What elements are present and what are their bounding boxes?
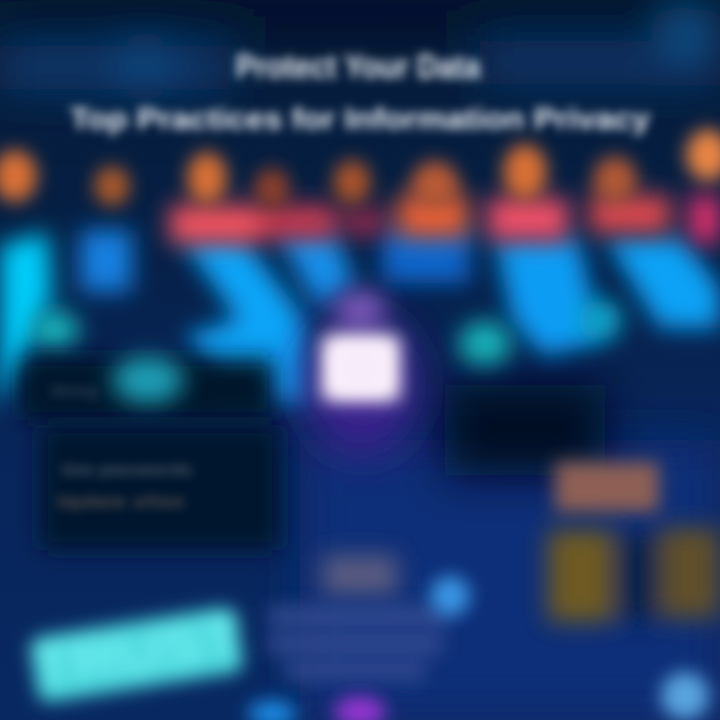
panel: left lower bbox=[40, 425, 280, 550]
icon: padlock bbox=[304, 290, 420, 455]
panel: dark right bbox=[445, 385, 605, 475]
panel: left lower: Use passwords bbox=[62, 462, 192, 479]
title line 2: Top Practices for Information Privacy bbox=[70, 101, 651, 136]
chart title bbox=[555, 462, 659, 512]
decorative dots bbox=[248, 576, 709, 720]
panel: left lower: Update often bbox=[58, 494, 183, 511]
panel: lower centre bbox=[268, 555, 448, 680]
people: orange heads bbox=[0, 129, 720, 209]
panel: left upper: Strong bbox=[50, 383, 97, 400]
bars bbox=[548, 528, 720, 622]
panel: lower left cyan text: TRUST bbox=[29, 604, 246, 701]
title bbox=[70, 48, 651, 136]
title line 1: Protect Your Data bbox=[236, 48, 481, 86]
panel: bar chart right bbox=[548, 462, 720, 622]
body text block bbox=[268, 606, 448, 680]
people: blue bodies bbox=[0, 228, 720, 410]
teal highlights bbox=[31, 300, 622, 369]
panel: left upper bbox=[20, 356, 275, 420]
row of people bbox=[0, 129, 720, 410]
heading bbox=[322, 555, 398, 595]
people: red torsos bbox=[170, 195, 720, 243]
